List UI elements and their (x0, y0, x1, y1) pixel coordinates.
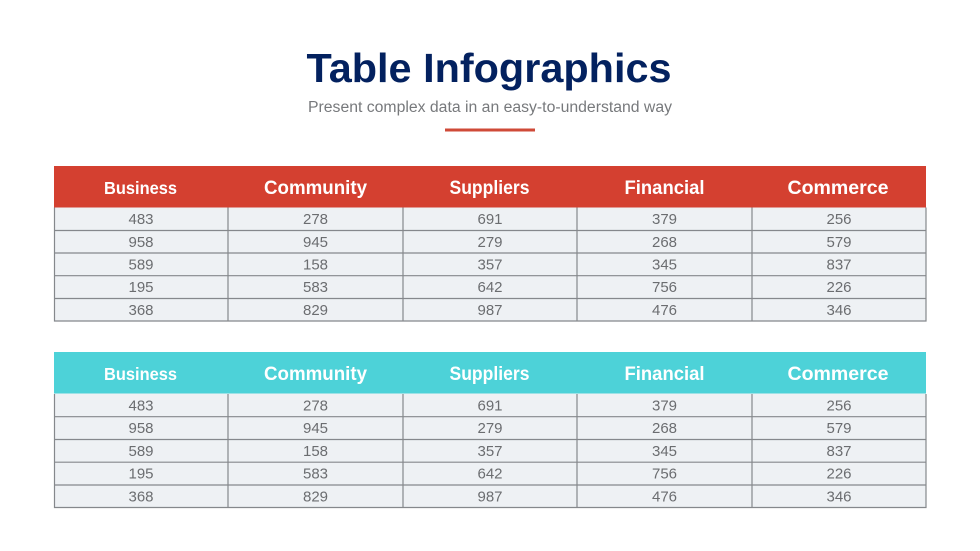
data rows: teal table: 829 (303, 488, 328, 506)
table: red (54, 166, 926, 321)
header row: teal: Community (264, 364, 367, 385)
header row: teal: Suppliers (450, 364, 530, 385)
data rows: red table: 945 (303, 234, 328, 251)
data rows: red table (128, 211, 852, 319)
header row: red: Community (264, 178, 367, 199)
data rows: teal table (128, 398, 852, 506)
header row: red: Business (104, 178, 177, 198)
accent underline (445, 128, 535, 132)
data rows: red table: 483 (128, 211, 154, 228)
header row: red (54, 166, 926, 208)
data rows: red table: 579 (826, 234, 852, 251)
title: Table Infographics (306, 45, 672, 91)
header row: teal: Financial (624, 364, 704, 385)
data rows: teal table: 226 (826, 466, 852, 482)
data rows: red table: 256 (826, 211, 852, 228)
data rows: teal table: 987 (477, 488, 503, 506)
data rows: red table: 837 (826, 256, 852, 274)
data rows: teal table: 483 (128, 398, 154, 414)
table: teal (54, 352, 926, 508)
data rows: teal table: 837 (826, 443, 852, 460)
data rows: red table: 226 (826, 279, 852, 296)
data rows: teal table: 368 (128, 488, 154, 506)
data rows: teal table: 195 (128, 466, 154, 482)
data rows: red table: 987 (477, 302, 503, 319)
data rows: teal table: 268 (652, 420, 677, 437)
data rows: red table: 476 (652, 302, 677, 319)
data rows: red table: 278 (303, 211, 328, 228)
header row: teal: Business (104, 364, 177, 384)
table body background (54, 207, 926, 321)
data rows: teal table: 379 (652, 398, 677, 414)
data rows: red table: 357 (477, 256, 503, 274)
header row: teal: Commerce (788, 364, 888, 385)
data rows: red table: 195 (128, 279, 154, 296)
data rows: red table: 958 (128, 234, 154, 251)
data rows: red table: 345 (652, 256, 677, 274)
data rows: red table: 346 (826, 302, 852, 319)
data rows: red table: 279 (477, 234, 503, 251)
data rows: red table: 642 (477, 279, 503, 296)
data rows: teal table: 642 (477, 466, 503, 482)
data rows: red table: 368 (128, 302, 154, 319)
data rows: teal table: 476 (652, 488, 677, 506)
data rows: teal table: 278 (303, 398, 328, 414)
subtitle: Present complex data in an easy-to-understand way (308, 99, 672, 116)
header row: teal (54, 352, 926, 394)
data rows: red table: 829 (303, 302, 328, 319)
table body background (54, 394, 926, 508)
data rows: teal table: 346 (826, 488, 852, 506)
data rows: red table: 268 (652, 234, 677, 251)
data rows: red table: 158 (303, 256, 328, 274)
data rows: red table: 583 (303, 279, 328, 296)
data rows: teal table: 158 (303, 443, 328, 460)
data rows: teal table: 279 (477, 420, 503, 437)
data rows: teal table: 579 (826, 420, 852, 437)
data rows: teal table: 756 (652, 466, 677, 482)
header row: red: Financial (624, 178, 704, 199)
data rows: teal table: 345 (652, 443, 677, 460)
data rows: teal table: 256 (826, 398, 852, 414)
data rows: teal table: 958 (128, 420, 154, 437)
data rows: teal table: 691 (477, 398, 503, 414)
data rows: teal table: 945 (303, 420, 328, 437)
data rows: teal table: 589 (128, 443, 154, 460)
header row: red: Suppliers (450, 178, 530, 199)
header row: red: Commerce (788, 178, 888, 199)
data rows: red table: 691 (477, 211, 503, 228)
data rows: red table: 756 (652, 279, 677, 296)
data rows: teal table: 583 (303, 466, 328, 482)
data rows: red table: 379 (652, 211, 677, 228)
data rows: red table: 589 (128, 256, 154, 274)
data rows: teal table: 357 (477, 443, 503, 460)
